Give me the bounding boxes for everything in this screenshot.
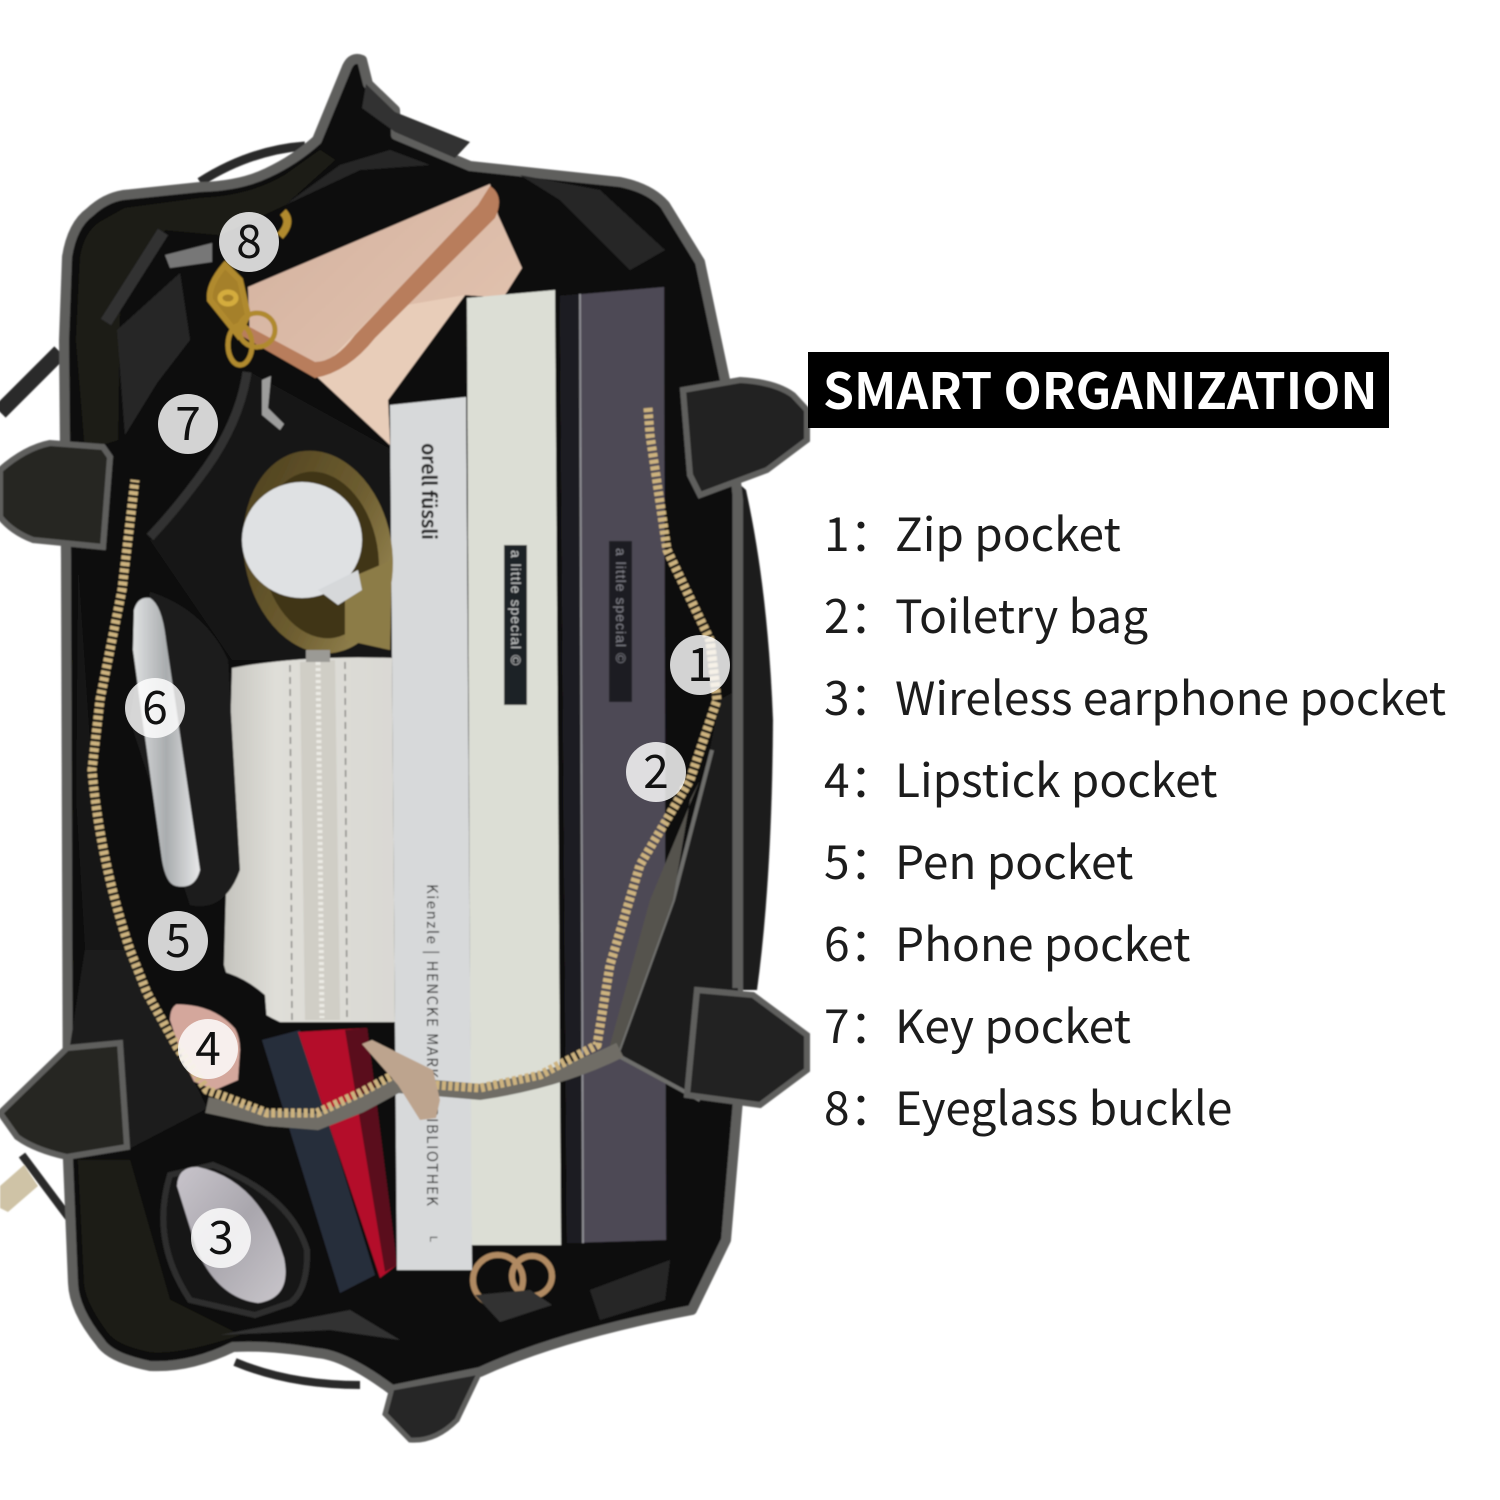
item 6: 6：: [824, 909, 896, 975]
bottom ring hardware: [473, 1255, 552, 1322]
white book with spine title: L: [427, 1236, 439, 1242]
badge 2: [626, 736, 686, 802]
white book with spine title: orell füssli: [416, 443, 445, 540]
badge 4: 4: [195, 1013, 221, 1079]
leather bulge on right side: [735, 480, 773, 990]
phone in side pocket: [130, 592, 240, 906]
left upper flap strip: [76, 560, 130, 950]
right handle tab lower: [687, 990, 807, 1105]
feature list: [824, 499, 1446, 1139]
badge 1: 1: [687, 629, 713, 695]
purple-grey book: a little special ©: [613, 548, 629, 664]
key pocket panel with key: [150, 372, 392, 660]
loose hardware at left edge: [0, 1165, 38, 1212]
item 7: Key pocket: [895, 991, 1131, 1057]
notebooks navy and red: [262, 1028, 397, 1293]
item 3: 3：: [824, 663, 896, 729]
item 6: Phone pocket: [895, 909, 1190, 975]
badge 3: [191, 1202, 251, 1268]
badge 8: [219, 206, 279, 272]
bag rim and interior: [64, 59, 738, 1390]
back straps: [0, 146, 360, 1385]
badge 3: 3: [208, 1202, 234, 1268]
white book with spine title: [390, 397, 472, 1270]
badge 8: 8: [236, 206, 262, 272]
item 1: 1：: [824, 499, 896, 565]
item 8: 8：: [824, 1073, 896, 1139]
white toiletry pouch: [224, 650, 395, 1022]
left handle tab lower: [0, 1043, 127, 1157]
wireless earphone case: [163, 1165, 307, 1315]
item 8: Eyeglass buckle: [895, 1073, 1232, 1139]
right front flap: [610, 690, 738, 1100]
left handle tab upper: [0, 443, 110, 547]
off-white book: [467, 290, 561, 1245]
item 2: 2：: [824, 581, 896, 647]
inner leather walls: [76, 150, 335, 1352]
zipper: [92, 408, 717, 1122]
badge 5: 5: [165, 905, 191, 971]
left flap lower leather: [70, 950, 207, 1148]
purple-grey book: [560, 287, 666, 1243]
badge 6: 6: [142, 672, 168, 738]
glass perfume bottle: [227, 439, 409, 665]
badge 5: [148, 905, 208, 971]
top corner leather flap: [362, 84, 470, 158]
bottom corner leather flap: [385, 1372, 480, 1440]
badge 7: [158, 388, 218, 454]
item 1: Zip pocket: [895, 499, 1121, 565]
off-white book: a little special ©: [508, 550, 524, 666]
right handle tab upper: [683, 380, 807, 495]
inner strap strip: [106, 232, 163, 322]
badge 7: 7: [175, 388, 201, 454]
lipstick in pocket: [160, 968, 270, 1095]
vertical rim line right: [732, 495, 742, 988]
badge 6: [125, 672, 185, 738]
zipper pull: [362, 1040, 440, 1120]
item 4: 4：: [824, 745, 896, 811]
badge 2: 2: [643, 736, 669, 802]
striped lining panels: [117, 150, 670, 1340]
item 5: Pen pocket: [895, 827, 1133, 893]
title banner: SMART ORGANIZATION: [823, 352, 1378, 424]
item 7: 7：: [824, 991, 896, 1057]
item 4: Lipstick pocket: [895, 745, 1217, 811]
white book with spine title: Kienzle | HENCKE MARKUS BIBLIOTHEK: [422, 884, 443, 1206]
item 2: Toiletry bag: [895, 581, 1148, 647]
number badges: [125, 206, 730, 1268]
badge 1: [670, 629, 730, 695]
gold chain eyeglass buckle: [210, 212, 287, 365]
tan leather glasses case: [240, 184, 522, 445]
item 5: 5：: [824, 827, 896, 893]
item 3: Wireless earphone pocket: [895, 663, 1446, 729]
badge 4: [178, 1013, 238, 1079]
